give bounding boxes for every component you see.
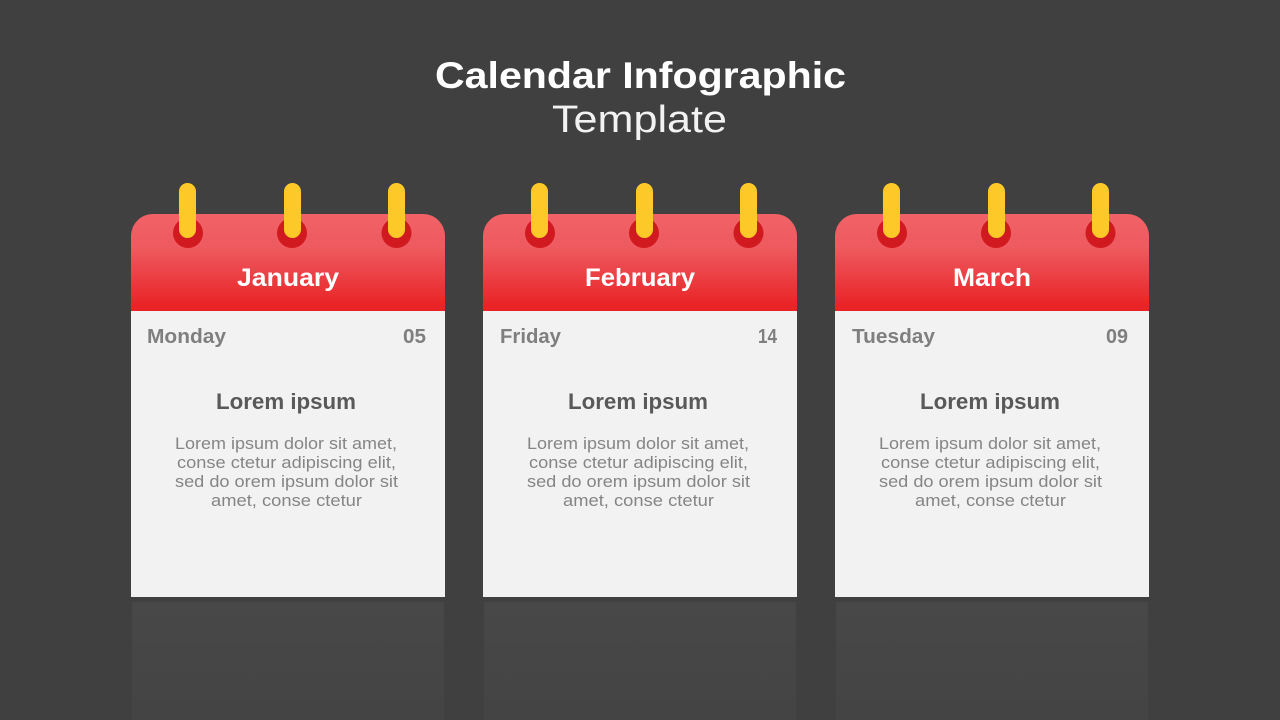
date: 14: 14 <box>758 326 778 348</box>
header: February <box>483 214 797 311</box>
body text: March card: amet, conse ctetur <box>915 492 1067 510</box>
reflection: March <box>836 602 1148 720</box>
body text: January card: conse ctetur adipiscing elit, <box>177 454 396 472</box>
body text: March card: sed do orem ipsum dolor sit <box>879 473 1102 491</box>
panel: March calendar <box>835 183 1149 720</box>
binder rings: March <box>877 183 1116 248</box>
reflection: January <box>132 602 444 720</box>
body text: January card: amet, conse ctetur <box>211 492 363 510</box>
body text: February card: amet, conse ctetur <box>563 492 715 510</box>
heading: March card: Lorem ipsum <box>920 389 1060 414</box>
body text: March card: Lorem ipsum dolor sit amet, <box>879 435 1101 453</box>
weekday: Tuesday: Tuesday <box>852 326 936 348</box>
body text: February card: sed do orem ipsum dolor sit <box>527 473 750 491</box>
body text: January card: sed do orem ipsum dolor sit <box>175 473 398 491</box>
panel: February calendar <box>483 183 797 720</box>
page: January <box>131 311 445 597</box>
binder rings: January <box>173 183 412 248</box>
month: February: February <box>585 264 695 292</box>
body text: February card: conse ctetur adipiscing elit, <box>529 454 748 472</box>
weekday: Monday: Monday <box>147 326 227 348</box>
page: February <box>483 311 797 597</box>
title: Template <box>552 99 727 141</box>
heading: February card: Lorem ipsum <box>568 389 708 414</box>
month: January: January <box>237 264 339 292</box>
reflection: February <box>484 602 796 720</box>
body text: February card <box>527 435 750 510</box>
body text: February card: Lorem ipsum dolor sit amet, <box>527 435 749 453</box>
title <box>435 55 846 141</box>
header: March <box>835 214 1149 311</box>
body text: January card <box>175 435 398 510</box>
header: January <box>131 214 445 311</box>
heading: January card: Lorem ipsum <box>216 389 356 414</box>
body text: March card <box>879 435 1102 510</box>
panel: January calendar <box>131 183 445 720</box>
body text: March card: conse ctetur adipiscing elit, <box>881 454 1100 472</box>
binder rings: February <box>525 183 764 248</box>
date: 09: 09 <box>1106 326 1128 348</box>
page: March <box>835 311 1149 597</box>
title: Calendar Infographic <box>435 55 846 96</box>
body text: January card: Lorem ipsum dolor sit amet, <box>175 435 397 453</box>
date: 05: 05 <box>403 326 426 348</box>
weekday: Friday: Friday <box>500 326 562 348</box>
month: March: March <box>953 264 1031 292</box>
